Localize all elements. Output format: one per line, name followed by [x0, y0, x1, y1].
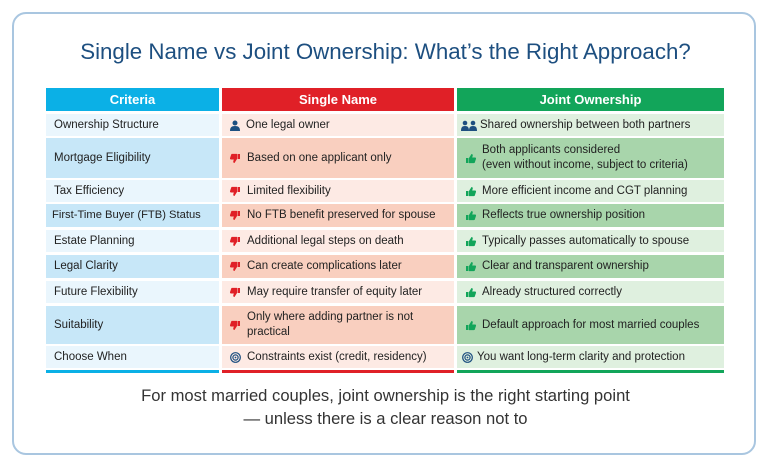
table: Clear and transparent ownership: [482, 260, 649, 272]
header: criteria: [46, 88, 219, 111]
table: You want long-term clarity and protection: [477, 350, 685, 362]
table: practical: [247, 326, 290, 338]
table: Shared ownership between both partners: [480, 118, 690, 130]
table: No FTB benefit preserved for spouse: [247, 209, 436, 221]
table: Ownership Structure: [54, 118, 159, 130]
table: First-Time Buyer (FTB) Status: [52, 209, 201, 221]
table: Suitability: [54, 318, 103, 330]
header: joint ownership: [457, 88, 724, 111]
table: Default approach for most married couples: [482, 318, 699, 330]
table: Both applicants considered: [482, 144, 620, 156]
table: One legal owner: [246, 118, 330, 130]
table: Typically passes automatically to spouse: [482, 234, 689, 246]
table: Mortgage Eligibility: [54, 152, 151, 164]
header: joint ownership: Joint Ownership: [540, 92, 641, 107]
table: Legal Clarity: [54, 260, 118, 272]
table: Choose When: [54, 350, 127, 362]
header: single name: [222, 88, 454, 111]
table: Additional legal steps on death: [247, 234, 404, 246]
table: More efficient income and CGT planning: [482, 184, 687, 196]
footer text: [141, 386, 630, 428]
title: Single Name vs Joint Ownership: What’s the Right Approach?: [80, 39, 691, 64]
table: Tax Efficiency: [54, 184, 124, 196]
table: Reflects true ownership position: [482, 209, 645, 221]
footer text: For most married couples, joint ownership is the right starting point: [141, 386, 630, 405]
header: criteria: Criteria: [110, 92, 155, 107]
table: (even without income, subject to criteria): [482, 159, 688, 171]
footer text: — unless there is a clear reason not to: [243, 409, 528, 428]
table: Estate Planning: [54, 234, 135, 246]
table: Already structured correctly: [482, 286, 622, 298]
table: May require transfer of equity later: [247, 286, 422, 298]
table: Limited flexibility: [247, 184, 331, 196]
table: Future Flexibility: [54, 286, 138, 298]
table: Based on one applicant only: [247, 152, 392, 164]
table: Constraints exist (credit, residency): [247, 350, 427, 362]
table: Only where adding partner is not: [247, 311, 413, 323]
header: single name: Single Name: [299, 92, 377, 107]
table: Can create complications later: [247, 260, 402, 272]
